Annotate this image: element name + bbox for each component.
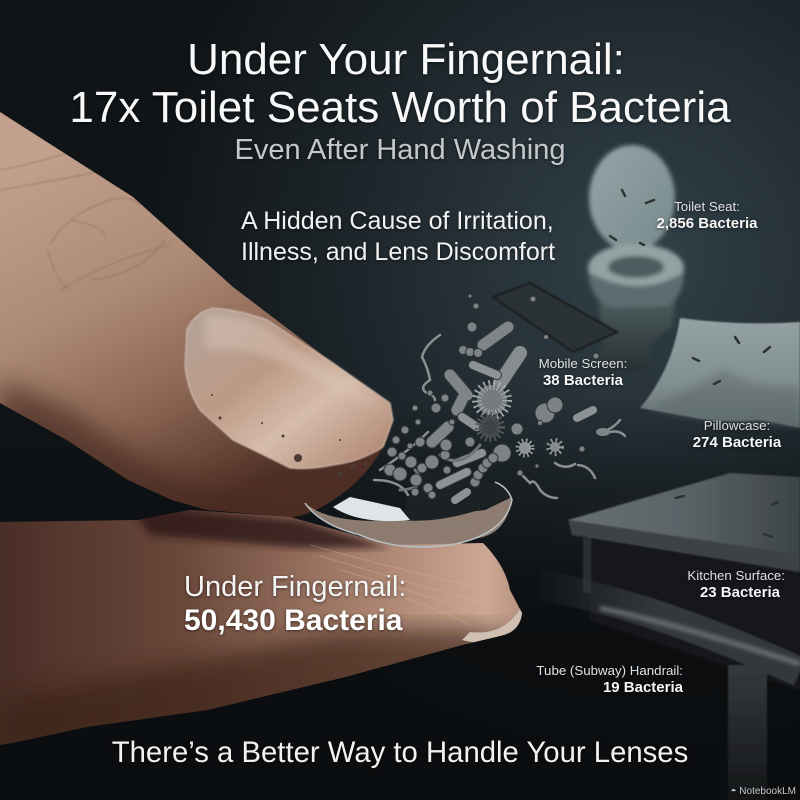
contact lens — [305, 470, 512, 547]
title — [69, 35, 731, 132]
label: mobile screen — [539, 356, 627, 389]
bacteria cluster — [374, 327, 625, 500]
label: subway handrail — [536, 663, 684, 696]
label: pillowcase: 274 Bacteria — [693, 434, 781, 451]
label: toilet seat: Toilet Seat: — [674, 199, 740, 214]
subtitle: Even After Hand Washing — [234, 134, 566, 166]
label: toilet seat: 2,856 Bacteria — [657, 215, 757, 232]
label: pillowcase: Pillowcase: — [704, 418, 770, 433]
label: kitchen surface: Kitchen Surface: — [687, 568, 785, 583]
spiky microbes — [477, 385, 610, 454]
tagline: A Hidden Cause of Irritation, — [241, 207, 554, 235]
label: subway handrail: Tube (Subway) Handrail: — [536, 663, 683, 678]
small specks on objects — [610, 190, 778, 537]
label: mobile screen: Mobile Screen: — [539, 356, 627, 371]
tagline — [241, 207, 555, 266]
label: pillowcase — [693, 418, 782, 451]
label: mobile screen: 38 Bacteria — [543, 372, 623, 389]
label: toilet seat — [656, 199, 758, 232]
pillow — [640, 318, 800, 428]
toilet — [588, 145, 684, 372]
tagline: Illness, and Lens Discomfort — [241, 238, 555, 266]
footer call to action: There’s a Better Way to Handle Your Lenses — [112, 736, 688, 769]
title: 17x Toilet Seats Worth of Bacteria — [69, 83, 731, 132]
label: kitchen surface — [687, 568, 785, 601]
nail dirt specks — [211, 394, 367, 476]
watermark: ◓ NotebookLM — [730, 786, 796, 797]
mobile phone — [493, 283, 617, 352]
title: Under Your Fingernail: — [187, 35, 625, 84]
label: kitchen surface: 23 Bacteria — [700, 584, 780, 601]
index finger — [0, 100, 400, 530]
label: subway handrail: 19 Bacteria — [603, 679, 683, 696]
label: under fingernail: Under Fingernail: — [184, 571, 406, 603]
label: under fingernail: 50,430 Bacteria — [184, 604, 402, 637]
lower thumb — [0, 510, 522, 745]
label: under fingernail — [184, 571, 406, 637]
handrail — [530, 584, 800, 800]
fingernail — [185, 308, 393, 469]
kitchen counter — [568, 473, 800, 690]
